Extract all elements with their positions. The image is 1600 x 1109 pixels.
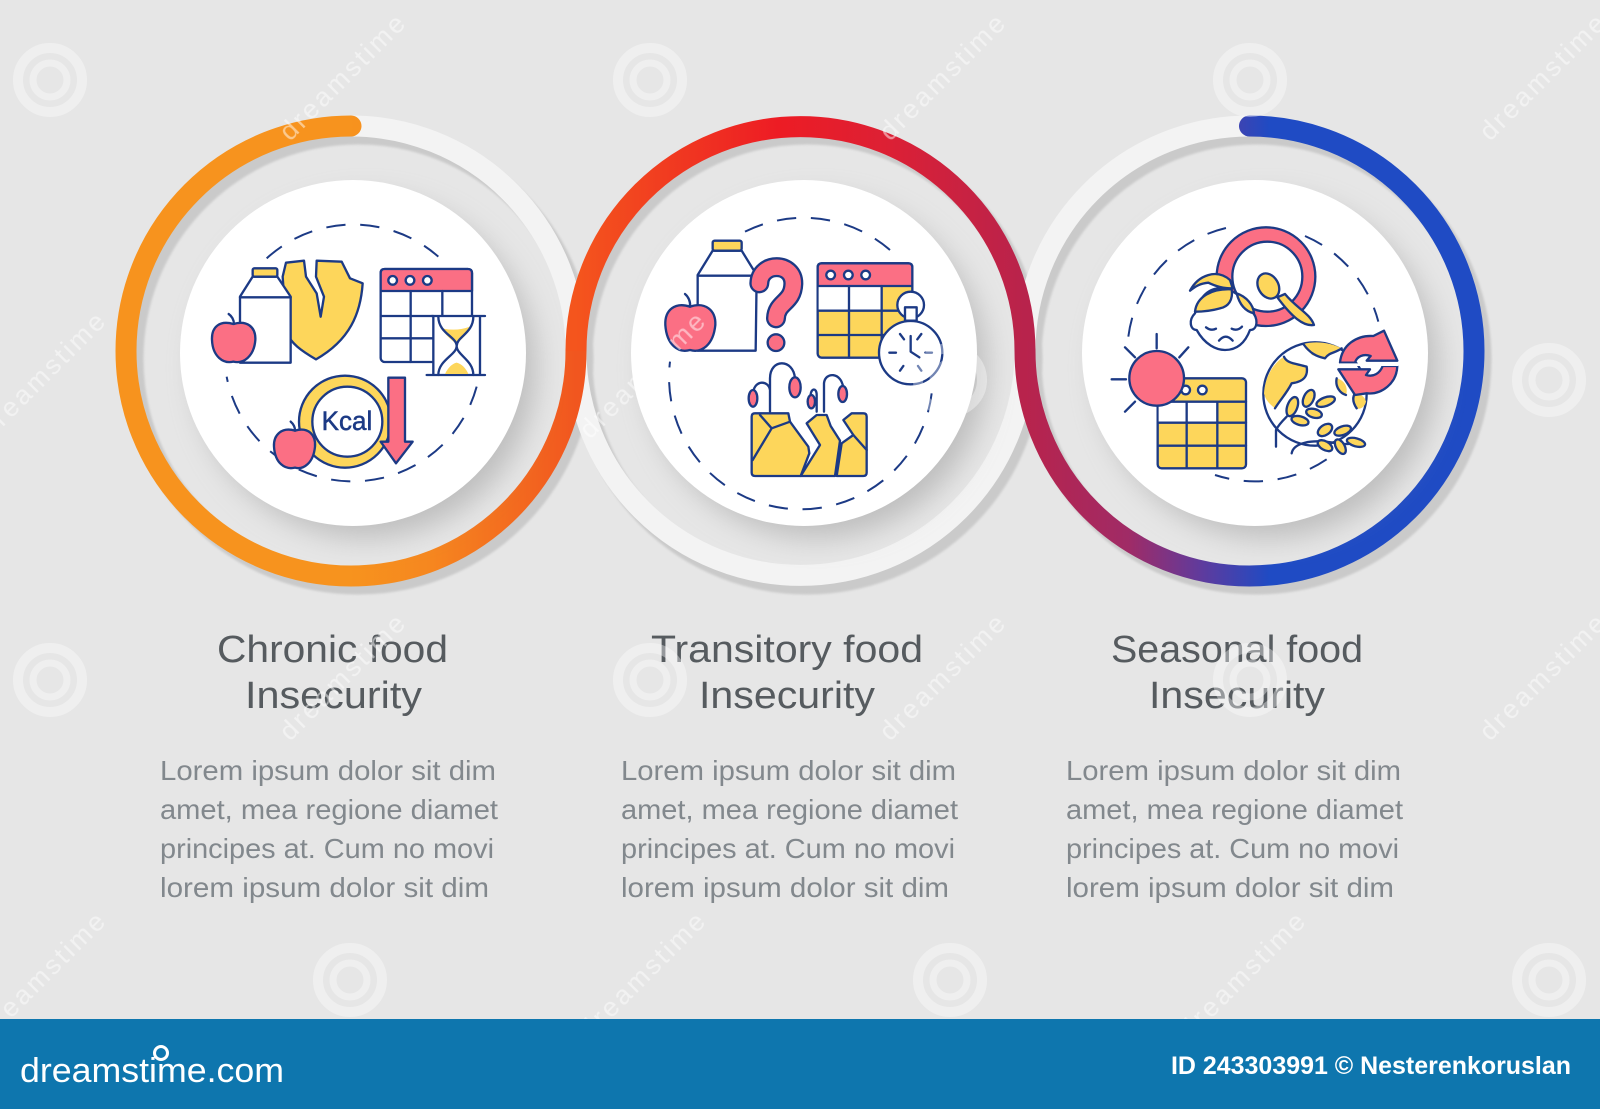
- text block: seasonal food insecurity: Seasonal food: [1111, 629, 1363, 671]
- icon: withered plants: [749, 363, 847, 412]
- panel: pale ring segments: [351, 126, 1250, 575]
- icon: plate and spoon: [1217, 227, 1315, 326]
- text block: transitory food insecurity: Lorem ipsum dolor sit dim: [621, 755, 956, 786]
- watermark text: dreamstime: [273, 8, 411, 146]
- icon group: seasonal food insecurity: [1112, 227, 1398, 481]
- watermark text: dreamstime: [573, 306, 711, 444]
- text block: seasonal food insecurity: Lorem ipsum dolor sit dim: [1066, 755, 1401, 786]
- watermark text: dreamstime: [873, 608, 1011, 746]
- footer credit: ID 243303991 © Nesterenkoruslan: [1171, 1052, 1571, 1080]
- text block: transitory food insecurity: [621, 629, 958, 903]
- text block: chronic food insecurity: principes at. Cum no movi: [160, 833, 494, 864]
- icon: calendar with hourglass: [381, 269, 485, 375]
- panel: chronic disc: [180, 180, 526, 526]
- text block: transitory food insecurity: amet, mea regione diamet: [621, 794, 958, 825]
- text block: seasonal food insecurity: [1066, 629, 1403, 903]
- icon: apple small: [274, 422, 315, 468]
- panel: transitory ring: [576, 127, 1025, 351]
- footer logo: dreamstime.com: [20, 1052, 284, 1090]
- text block: transitory food insecurity: principes at. Cum no movi: [621, 833, 955, 864]
- text block: chronic food insecurity: Lorem ipsum dolor sit dim: [160, 755, 496, 786]
- icon: calendar: [1158, 378, 1246, 468]
- panel: chronic ring: [126, 126, 576, 576]
- text block: chronic food insecurity: [160, 629, 498, 903]
- icon group: chronic food insecurity: [212, 225, 485, 481]
- icon: calendar with stopwatch: [818, 263, 942, 384]
- icon: cracked shield: [283, 261, 363, 359]
- watermark text: dreamstime: [273, 608, 411, 746]
- text block: transitory food insecurity: Transitory food: [651, 629, 923, 671]
- text block: seasonal food insecurity: principes at. Cum no movi: [1066, 833, 1399, 864]
- panel: seasonal disc: [1082, 180, 1428, 526]
- text block: chronic food insecurity: Insecurity: [245, 675, 422, 717]
- watermark text: dreamstime: [573, 906, 711, 1044]
- icon: apple: [665, 294, 715, 351]
- icon: sun: [1112, 334, 1188, 412]
- text block: chronic food insecurity: lorem ipsum dolor sit dim: [160, 872, 489, 903]
- text block: seasonal food insecurity: lorem ipsum dolor sit dim: [1066, 872, 1394, 903]
- icon: down arrow: [381, 378, 413, 463]
- text block: transitory food insecurity: lorem ipsum dolor sit dim: [621, 872, 949, 903]
- text block: seasonal food insecurity: Insecurity: [1149, 675, 1325, 717]
- icon: milk carton: [698, 241, 757, 351]
- icon: earth with wheat: [1263, 342, 1367, 456]
- watermark text: dreamstime: [1173, 906, 1311, 1044]
- icon: kcal plate: [299, 376, 391, 468]
- text block: chronic food insecurity: Chronic food: [217, 629, 448, 671]
- panel: seasonal ring: [1025, 126, 1474, 576]
- text block: chronic food insecurity: amet, mea regione diamet: [160, 794, 498, 825]
- text block: seasonal food insecurity: amet, mea regione diamet: [1066, 794, 1403, 825]
- icon: cracked ground: [752, 413, 867, 476]
- text block: transitory food insecurity: Insecurity: [699, 675, 875, 717]
- icon: kcal plate: Kcal: [322, 406, 372, 436]
- icon: milk carton: [240, 268, 291, 363]
- icon: question mark: [759, 267, 793, 351]
- watermark text: dreamstime: [873, 8, 1011, 146]
- footer bar: [0, 1019, 1600, 1109]
- icon: sad child: [1190, 274, 1256, 350]
- panel: disc shadows: [196, 198, 1438, 538]
- icon: apple: [212, 314, 255, 362]
- panel: ring shadows: [133, 134, 1481, 584]
- panel: transitory disc: [631, 180, 977, 526]
- icon: refresh arrows: [1338, 331, 1398, 395]
- icon group: transitory food insecurity: [665, 218, 942, 509]
